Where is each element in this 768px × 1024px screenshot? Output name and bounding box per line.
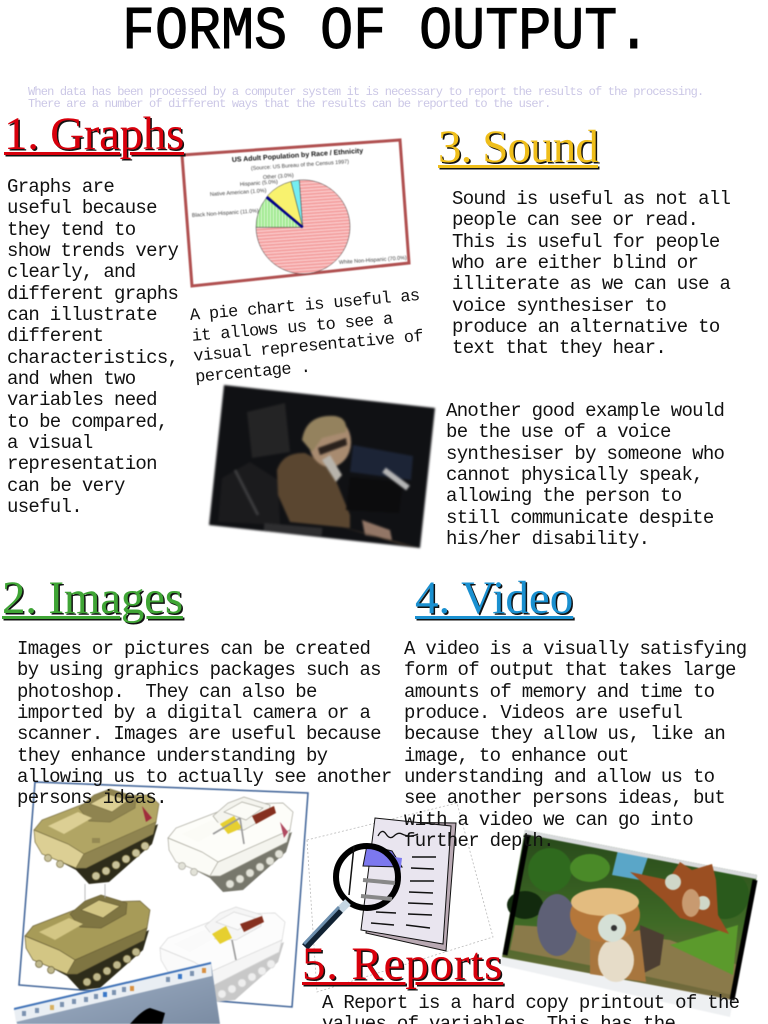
creature: tan squirrel [570,888,664,982]
chart labels: Native American (1.0%) [210,188,267,198]
heading: 4. Video: 4. Video [415,572,573,624]
heading: 3. Sound: 3. Sound [438,121,598,173]
text: images: Images or pictures can be created by using graphics packages such as photoshop. They can also be imported by a digital camera or a scanner. Images are useful because they enhance understanding by allowing us to actually see another persons ideas. [17,638,392,809]
tank colour 2 [25,884,150,990]
chart labels: Black Non-Hispanic (11.0%) [192,208,259,219]
tank outline 2 [160,907,285,1002]
text: voice synthesiser example: Another good example would be the use of a voice synthesiser by someone who cannot physically speak, allowing the person to still communicate despite his/her disability. [446,400,724,550]
chart labels: White Non-Hispanic (70.0%) [339,255,407,266]
caption: pie chart: A pie chart is useful as it allows us to see a visual representative of percentage . [189,287,424,387]
title: FORMS OF OUTPUT. [122,0,650,67]
tank outline 1 [168,797,293,892]
text: sound: Sound is useful as not all people can see or read. This is useful for people who are either blind or illiterate as we can use a voice synthesiser to produce an alternative to text that they hear. [452,188,730,359]
heading: 2. Images: 2. Images [2,572,183,624]
chart labels [192,148,407,266]
heading: 1. Graphs: 1. Graphs [4,108,184,160]
intro text: When data has been processed by a computer system it is necessary to report the results of the processing. There are a number of different ways that the results can be reported to the user. [28,85,703,111]
text: video: A video is a visually satisfying form of output that takes large amounts of memory and time to produce. Videos are useful because they allow us, like an image, to enhance out understanding and allow us to see another persons ideas, but with a video we can go into further depth. [404,638,746,852]
tank colour 1 [34,789,159,884]
heading: 5. Reports: 5. Reports [302,938,503,990]
creature: brown fox-squirrel [630,862,729,934]
chart labels: Hispanic (5.0%) [240,179,278,188]
chart labels: US Adult Population by Race / Ethnicity [232,148,364,164]
chart labels: Other (3.0%) [263,173,294,181]
text: graphs: Graphs are useful because they tend to show trends very clearly, and different graphs can illustrate different characteristics, and when two variables need to be compared, a visual representation can be very useful. [7,176,178,518]
creature: grey [537,894,577,956]
chart labels: (Source: US Bureau of the Census 1997) [251,159,349,172]
